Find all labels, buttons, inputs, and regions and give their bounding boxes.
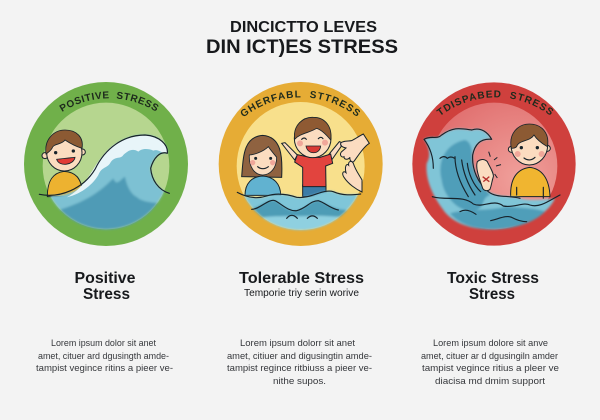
injured hand bbox=[477, 152, 501, 191]
heading: tolerable stress: Tolerable Stress bbox=[239, 270, 364, 287]
panel: tolerable stress badge bbox=[218, 82, 383, 246]
title: DIN ICT)ES STRESS bbox=[206, 36, 398, 58]
badge label: toxic stress: TDISPABED STRESS bbox=[436, 90, 554, 115]
heading: positive stress bbox=[74, 270, 136, 303]
heading: toxic stress bbox=[447, 270, 539, 303]
text block: toxic stress description: Lorem ipsum dolore sit anve bbox=[433, 338, 548, 348]
text block: tolerable stress description: nithe supos. bbox=[273, 376, 326, 386]
text block: positive stress description: Lorem ipsum dolor sit anet bbox=[51, 338, 156, 348]
heading: toxic stress: Toxic Stress bbox=[447, 270, 539, 287]
heading: toxic stress: Stress bbox=[469, 286, 515, 303]
text block: tolerable stress description bbox=[227, 338, 372, 386]
text block: positive stress description bbox=[36, 338, 173, 373]
text block: tolerable stress description: amet, citiuer and digusingtin amde- bbox=[227, 351, 372, 361]
infographic bbox=[24, 21, 576, 386]
badge label: tolerable stress: GHERFABL STTRESS bbox=[240, 90, 360, 116]
water waves bbox=[237, 191, 365, 233]
girl figure bbox=[242, 135, 282, 195]
breaking wave bbox=[424, 129, 560, 229]
reaching adult hands bbox=[341, 134, 369, 192]
subheading: Temporie triy serin worive bbox=[244, 288, 359, 299]
text block: toxic stress description bbox=[421, 338, 559, 386]
text block: toxic stress description: amet, cituer ar d dgusingiln amder bbox=[421, 351, 558, 361]
heading: positive stress: Stress bbox=[83, 286, 130, 303]
text block: tolerable stress description: Lorem ipsum dolorr sit anet bbox=[240, 338, 355, 348]
text block: toxic stress description: tampist vegince ritius a pleer ve bbox=[422, 363, 559, 373]
text block: positive stress description: amet, cituer ard dgusingth amde- bbox=[38, 351, 169, 361]
panel: positive stress badge bbox=[24, 82, 188, 246]
title bbox=[206, 19, 398, 58]
text block: tolerable stress description: tampist regince ritbiuss a pieer ve- bbox=[227, 363, 372, 373]
badge label: positive stress: POSITIVE STRESS bbox=[59, 91, 158, 112]
ocean wave bbox=[39, 135, 170, 233]
heading: tolerable stress bbox=[239, 270, 364, 299]
heading: positive stress: Positive bbox=[74, 270, 136, 287]
boy figure in water bbox=[508, 124, 550, 198]
text block: toxic stress description: diacisa md dmim support bbox=[435, 376, 545, 386]
text block: positive stress description: tampist vegince ritins a pieer ve- bbox=[36, 363, 173, 373]
boy figure with raised arms bbox=[282, 117, 343, 197]
panel: toxic stress badge bbox=[412, 82, 576, 246]
boy figure bbox=[42, 130, 85, 197]
title: DINCICTTO LEVES bbox=[230, 19, 377, 36]
